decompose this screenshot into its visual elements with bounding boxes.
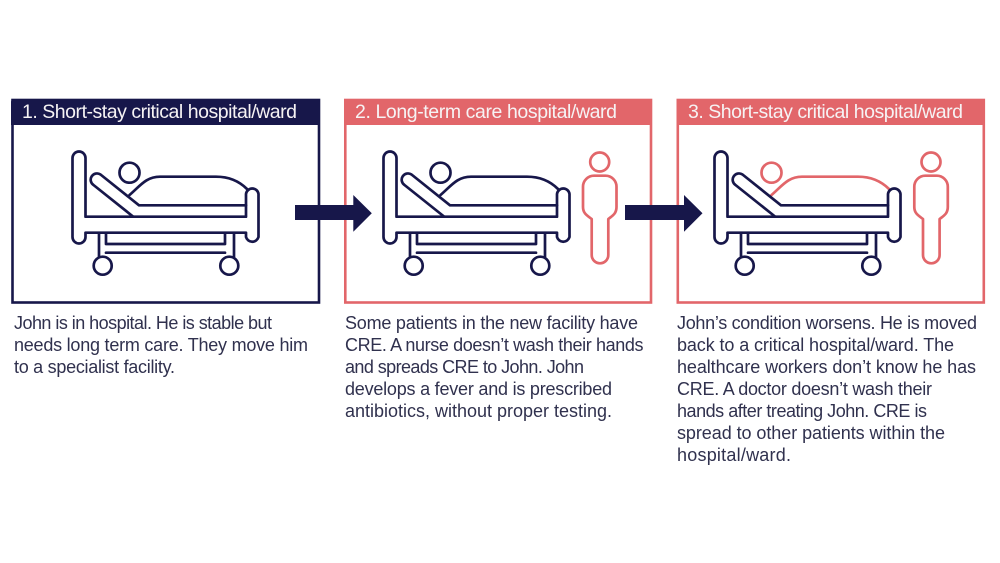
panel 2 header bar <box>344 99 652 125</box>
panel 3 frame <box>678 100 984 302</box>
icon: nurse figure <box>583 152 616 263</box>
icon: hospital bed with patient <box>72 152 258 275</box>
panel 1 heading: 1. Short-stay critical hospital/ward <box>22 101 297 123</box>
panel: step 2 long-term care ward <box>344 99 652 302</box>
text: step 3 description: John’s condition worsens. He is moved <box>677 313 977 333</box>
text: step 1 description: John is in hospital. He is stable but <box>14 313 272 333</box>
text: step 3 description: hospital/ward. <box>677 445 791 465</box>
panel 2 heading: 2. Long-term care hospital/ward <box>355 101 617 123</box>
panel 2 frame <box>345 100 651 302</box>
icon: hospital bed with infected patient <box>714 152 900 275</box>
panel 1 header bar <box>11 99 320 125</box>
text: step 2 description: CRE. A nurse doesn’t wash their hands <box>345 335 644 355</box>
text: step 3 description: back to a critical hospital/ward. The <box>677 335 954 355</box>
text: step 1 description: needs long term care. They move him <box>14 335 308 355</box>
icon: hospital bed with patient <box>384 152 570 275</box>
text: step 2 description: antibiotics, without proper testing. <box>345 401 612 421</box>
icon: doctor figure <box>914 152 948 263</box>
panel 1 frame <box>12 100 319 302</box>
text: step 1 description <box>14 313 308 377</box>
text: step 3 description: hands after treating John. CRE is <box>677 401 927 421</box>
panel 3 header bar <box>676 99 985 125</box>
text: step 2 description <box>345 313 644 421</box>
text: step 3 description: healthcare workers don’t know he has <box>677 357 976 377</box>
panel: step 1 short-stay ward <box>11 99 320 302</box>
text: step 2 description: Some patients in the new facility have <box>345 313 638 333</box>
panel 3 heading: 3. Short-stay critical hospital/ward <box>688 101 963 123</box>
text: step 3 description <box>677 313 977 465</box>
panel: step 3 short-stay ward <box>676 99 985 302</box>
text: step 1 description: to a specialist facility. <box>14 357 175 377</box>
arrow: step 2 to step 3 <box>625 195 702 232</box>
text: step 2 description: and spreads CRE to John. John <box>345 357 584 377</box>
arrow: step 1 to step 2 <box>295 195 372 232</box>
text: step 3 description: spread to other patients within the <box>677 423 945 443</box>
text: step 2 description: develops a fever and is prescribed <box>345 379 612 399</box>
text: step 3 description: CRE. A doctor doesn’t wash their <box>677 379 932 399</box>
